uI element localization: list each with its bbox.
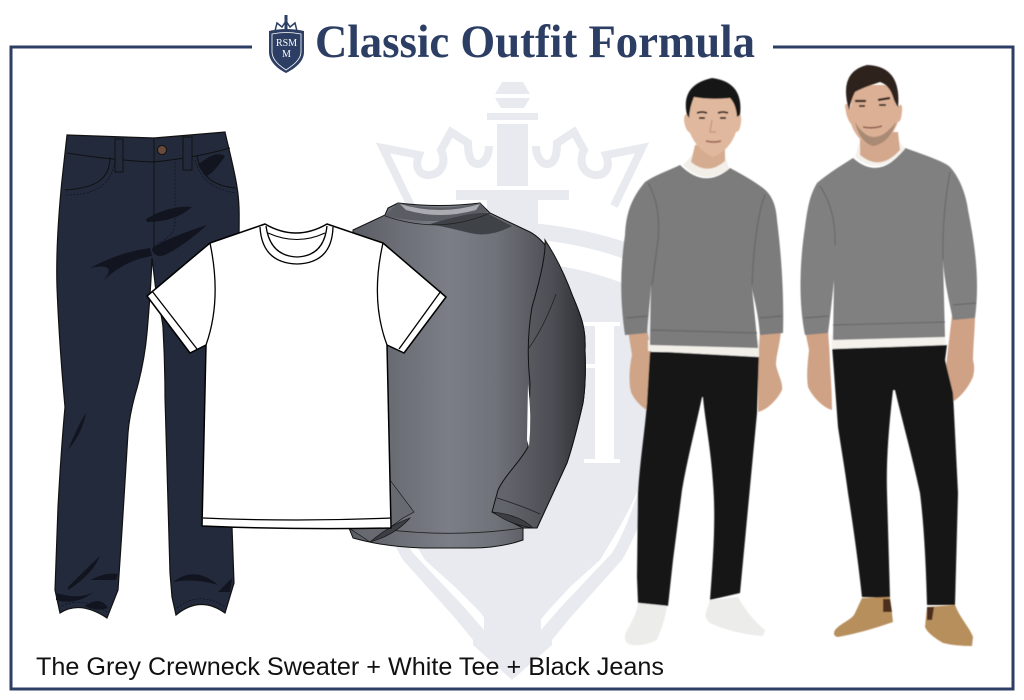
illustration: grey crewneck sweater (349, 203, 585, 548)
man 1 white tee hem (648, 340, 759, 357)
man 1 sweater (621, 165, 783, 348)
man 1 white sneakers (625, 597, 765, 645)
man 2 forearms and hands (805, 315, 975, 410)
man 1 head (684, 84, 741, 157)
illustration: white t-shirt (147, 224, 446, 529)
icon: logo crest: M (282, 49, 291, 60)
man 2 white tee hem (831, 335, 946, 349)
icon: logo crest: RSM (276, 38, 297, 49)
photo: man in grey sweater and white sneakers (621, 65, 977, 646)
man 2 jeans (832, 345, 958, 605)
man 2 neck and tee collar (855, 140, 905, 166)
man 1 forearms and hands (628, 330, 782, 413)
man 2 chelsea boots (834, 597, 973, 646)
icon: logo crest (269, 15, 304, 73)
man 1 jeans (637, 352, 759, 606)
caption: The Grey Crewneck Sweater + White Tee + Black Jeans (36, 653, 664, 681)
watermark: crest (360, 82, 665, 680)
man 2 sweater (800, 148, 977, 340)
illustration: navy jeans (55, 132, 239, 618)
title: Classic Outfit Formula (315, 16, 755, 68)
man 2 head (845, 85, 902, 146)
man 1 neck and tee collar (683, 155, 729, 177)
